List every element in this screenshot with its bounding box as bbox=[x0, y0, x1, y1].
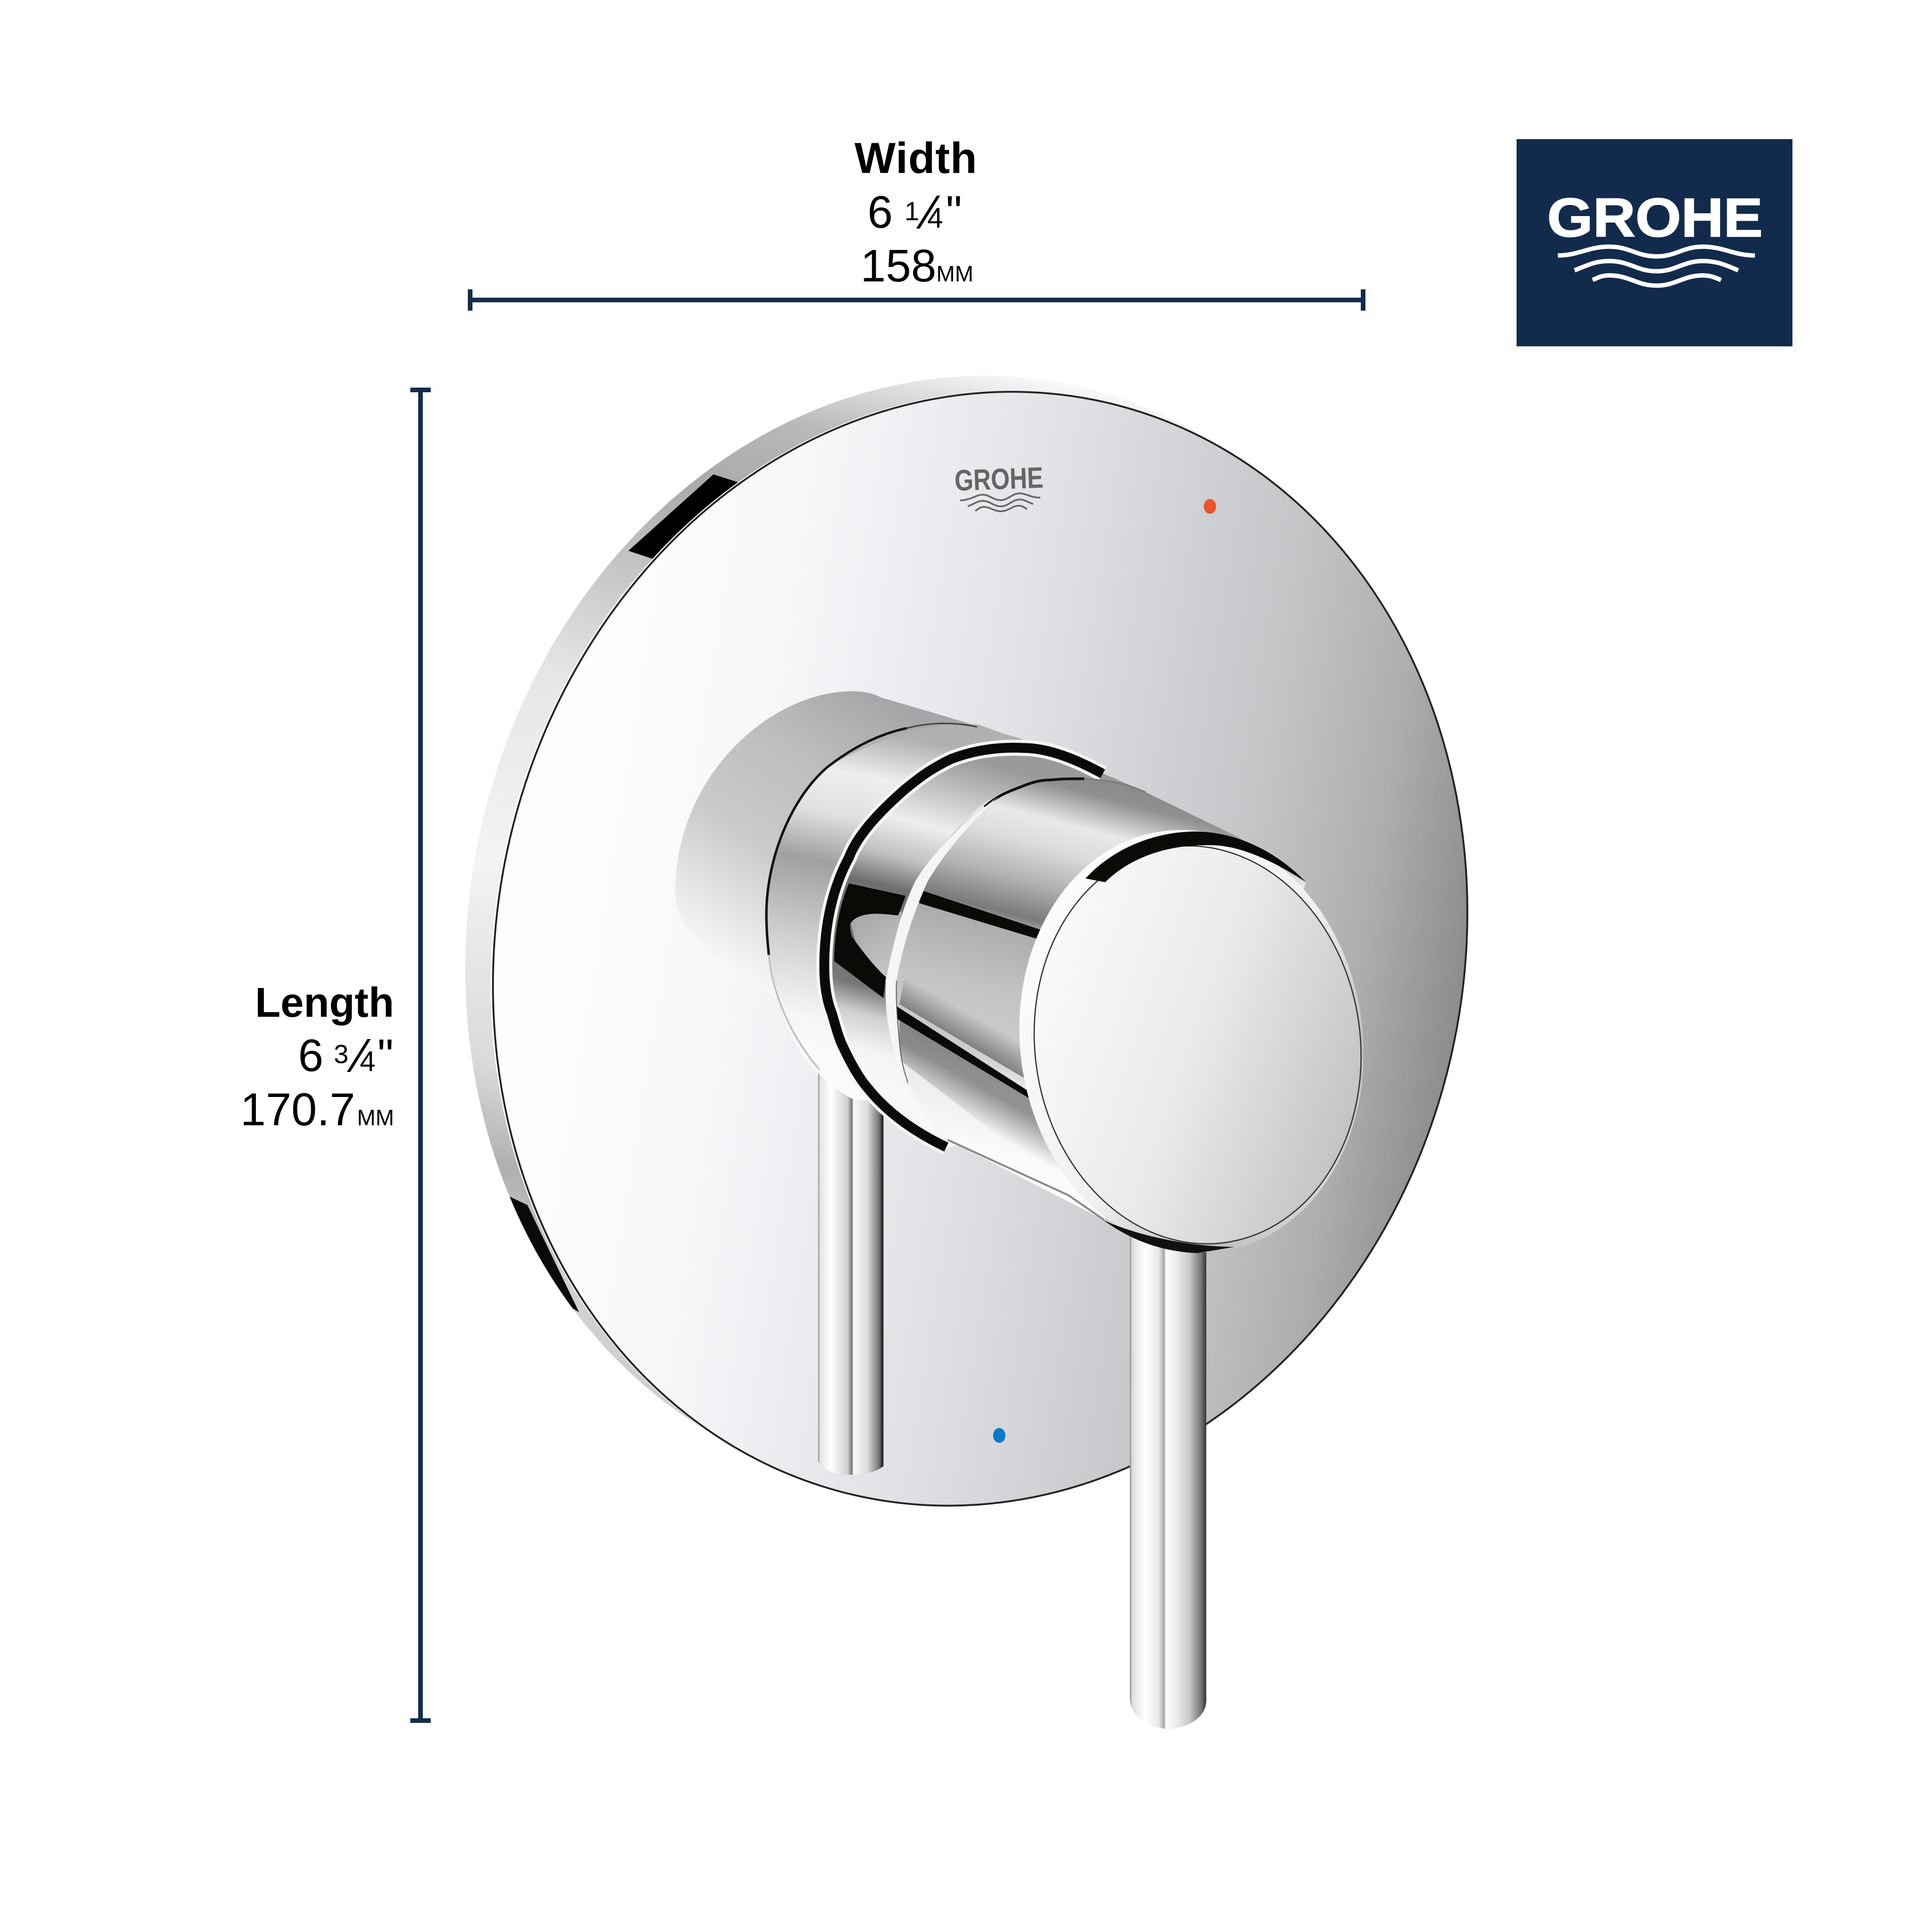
width in inches: " bbox=[946, 186, 962, 237]
back ring of the trim plate bbox=[465, 376, 1201, 1428]
engraved plate logo bbox=[954, 461, 1045, 513]
main round trim plate bbox=[381, 292, 1580, 1606]
reflection hollow bbox=[848, 912, 902, 986]
knob front face bbox=[992, 808, 1390, 1275]
icon: water waves bbox=[1558, 247, 1755, 286]
width in inches: ⁄ bbox=[916, 185, 940, 239]
bottom rim reflection bbox=[1103, 1220, 1235, 1253]
width dimension line bbox=[468, 289, 1365, 311]
width in inches: 6 bbox=[867, 186, 893, 237]
bottom edge highlight bbox=[948, 1140, 1104, 1220]
upper reflection band bbox=[919, 890, 1053, 944]
width in millimetres: 158MM bbox=[861, 240, 973, 291]
length in inches: 3 bbox=[334, 1039, 349, 1069]
length in inches: ⁄ bbox=[347, 1029, 371, 1082]
front lever bbox=[1130, 1232, 1206, 1728]
engraved plate logo: GROHE bbox=[954, 461, 1044, 497]
front ring dark arc bbox=[984, 779, 1084, 807]
length heading: Length bbox=[255, 980, 394, 1026]
knob groove collar bbox=[819, 739, 1146, 1148]
groove ring bbox=[824, 748, 1103, 1147]
lower band shading bbox=[899, 937, 1059, 1099]
knob front cylinder bbox=[886, 778, 1306, 1220]
width in inches: 1 bbox=[905, 197, 919, 226]
hot indicator dot bbox=[1204, 499, 1216, 514]
length in millimetres: 170.7MM bbox=[240, 1084, 394, 1135]
product photo: shower valve trim bbox=[465, 376, 1468, 1728]
width in inches: 4 bbox=[927, 202, 943, 234]
front ring white strip bbox=[886, 797, 998, 1140]
front ring upper edge bbox=[1084, 779, 1146, 792]
reflection frame bbox=[834, 883, 905, 998]
knob middle collar bbox=[766, 723, 1023, 1109]
length in inches: 6 bbox=[298, 1030, 324, 1081]
length dimension label bbox=[240, 980, 394, 1135]
length dimension line bbox=[410, 388, 431, 1723]
length in inches: 4 bbox=[360, 1046, 376, 1077]
top rim reflection bbox=[1085, 831, 1306, 882]
rear lever bbox=[818, 1059, 883, 1475]
lower reflection band bbox=[890, 1002, 1035, 1100]
brand logo box bbox=[1517, 139, 1792, 346]
brand wordmark: GROHE bbox=[1547, 187, 1763, 249]
knob rear base bbox=[675, 691, 1023, 1078]
cold indicator dot bbox=[993, 1428, 1006, 1443]
width dimension label bbox=[854, 134, 977, 291]
length in inches: " bbox=[377, 1030, 394, 1081]
width heading: Width bbox=[854, 134, 977, 182]
